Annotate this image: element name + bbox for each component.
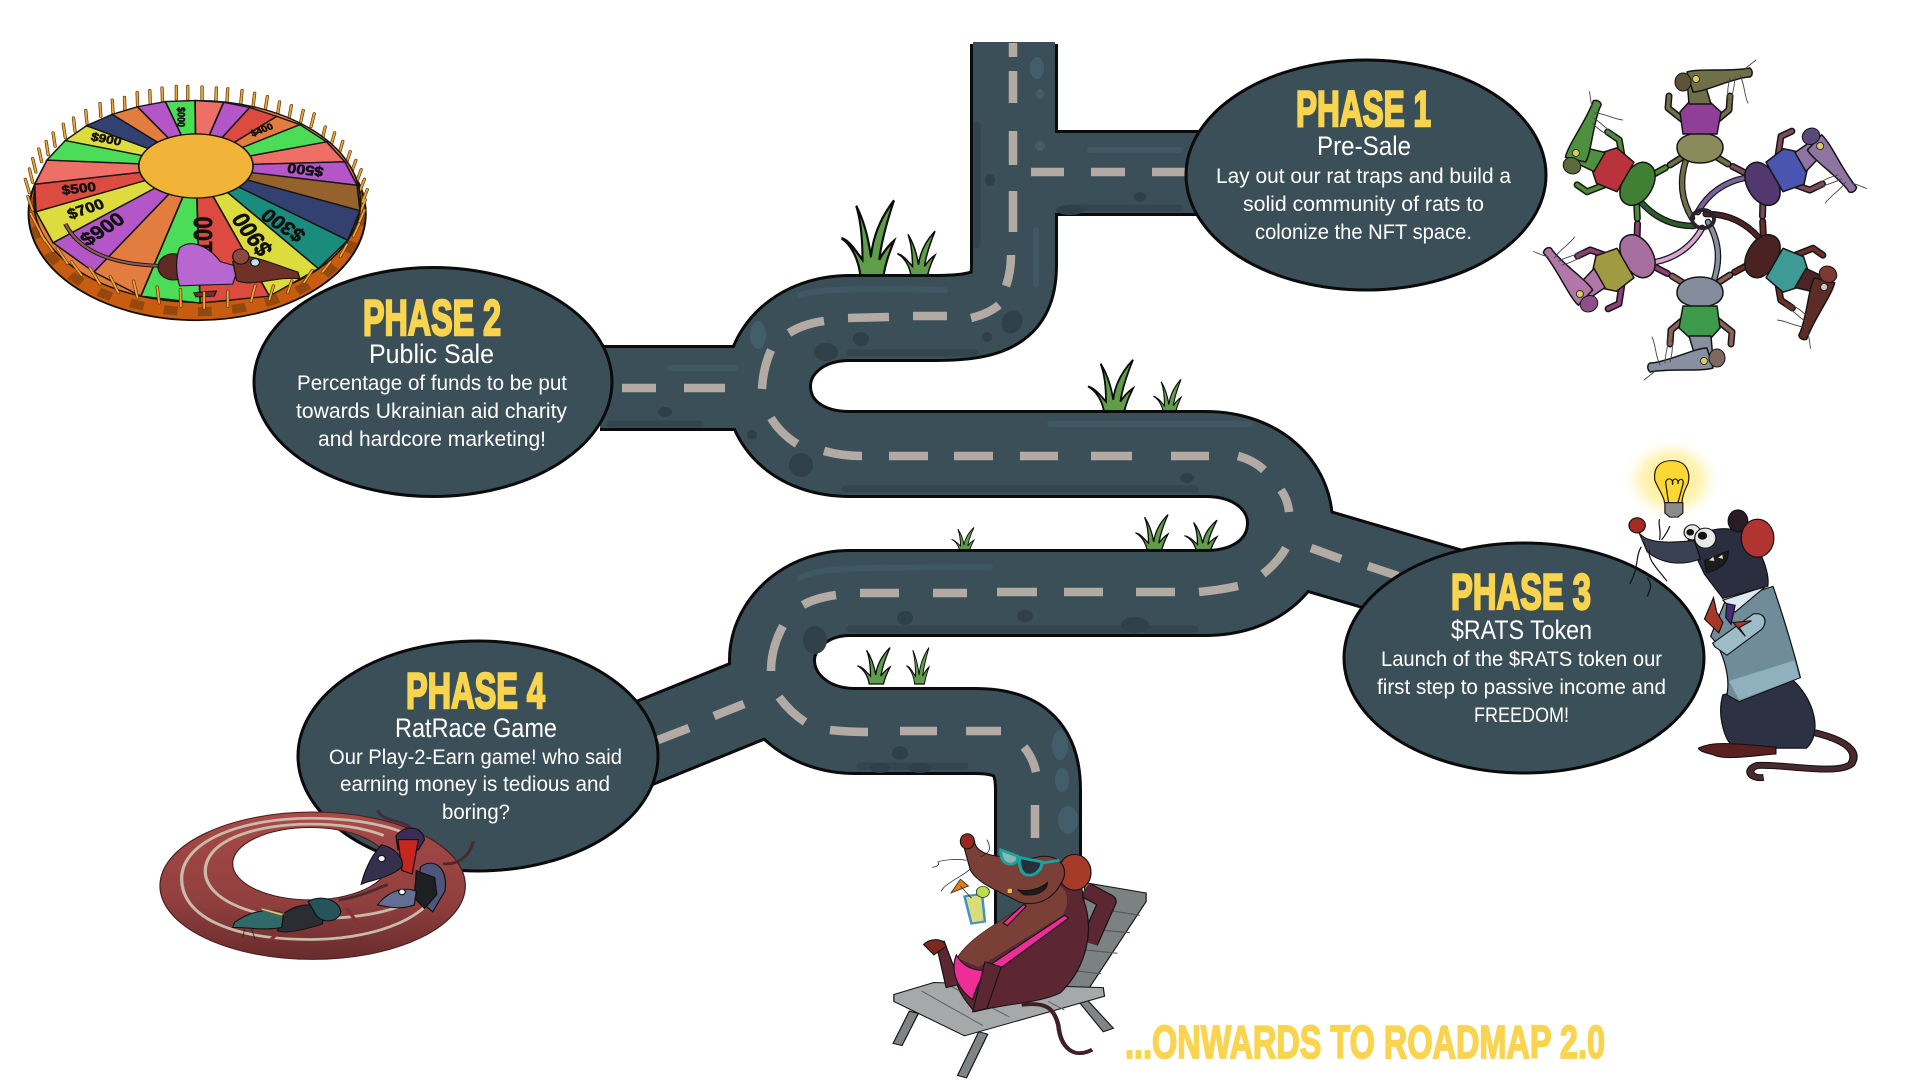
- wheel prize labels: $100: [190, 217, 219, 266]
- lightbulb glow: [1621, 437, 1723, 523]
- description: phase 4: earning money is tedious and: [340, 772, 610, 796]
- grass clumps: [842, 200, 1217, 684]
- rat sprawled on wheel: [65, 224, 300, 297]
- rat: green with red shirt: [1545, 92, 1726, 247]
- subtitle: public sale: Public Sale: [369, 339, 494, 369]
- wheel prize labels: $300: [257, 204, 310, 245]
- rat lower body: [1698, 678, 1815, 758]
- wheel prize labels: $500: [286, 160, 325, 179]
- description: phase 1: solid community of rats to: [1243, 192, 1484, 216]
- description: phase 3: FREEDOM!: [1474, 703, 1569, 727]
- winding road: [600, 42, 1450, 925]
- wheel prize labels: $400: [249, 122, 276, 139]
- description: phase 2: towards Ukrainian aid charity: [296, 399, 567, 423]
- tail knot: [1692, 210, 1714, 228]
- road shading: [610, 57, 1250, 834]
- rat arm behind head: [1085, 890, 1107, 943]
- rat tail: [1750, 733, 1854, 778]
- wheel prize labels: $900: [226, 209, 278, 260]
- wheel face: [34, 101, 360, 303]
- description: phase 4: Our Play-2-Earn game! who said: [329, 745, 622, 769]
- description: phase 2: and hardcore marketing!: [318, 427, 546, 451]
- circle of six rats illustration: [1533, 60, 1867, 380]
- panel: phase 2: [254, 268, 612, 496]
- rat tail: [1022, 1004, 1092, 1053]
- cocktail: [951, 879, 989, 924]
- sun lounger: [893, 883, 1146, 1078]
- subtitle: ratrace game: RatRace Game: [395, 713, 557, 743]
- wheel prize labels: $900: [90, 129, 123, 148]
- rat: grey with green shirt: [1644, 222, 1732, 380]
- lightbulb: [1655, 461, 1689, 517]
- rat: olive with purple shirt: [1668, 60, 1756, 218]
- heading: phase 4: PHASE 4: [406, 663, 545, 719]
- track lanes: [182, 818, 439, 939]
- whiskers: [1630, 519, 1670, 597]
- description: phase 2: Percentage of funds to be put: [297, 371, 567, 395]
- rat: blue grey: [378, 841, 473, 912]
- onwards to roadmap caption: ...ONWARDS TO ROADMAP 2.0: [1125, 1016, 1605, 1068]
- prize wheel illustration: [25, 86, 367, 320]
- description: phase 2: [296, 371, 567, 451]
- wheel prize labels: $700: [65, 196, 107, 223]
- rat: pink with olive shirt: [1533, 173, 1714, 328]
- sunglasses: [1001, 850, 1060, 875]
- heading: phase 1: PHASE 1: [1296, 81, 1431, 137]
- description: phase 4: [329, 745, 622, 824]
- rat: navy with red shirt: [361, 810, 424, 884]
- description: phase 1: Lay out our rat traps and build a: [1216, 164, 1511, 188]
- rat: lavender with blue shirt: [1686, 112, 1867, 267]
- wheel back pegs: [25, 86, 367, 222]
- description: phase 3: Launch of the $RATS token our: [1381, 647, 1662, 671]
- panel: phase 3: [1344, 543, 1704, 773]
- description: phase 1: colonize the NFT space.: [1255, 220, 1472, 244]
- rat: sprawled teal: [233, 884, 388, 941]
- lab coat: [1704, 586, 1800, 702]
- heading: phase 2: PHASE 2: [363, 290, 501, 346]
- subtitle: rats token: $RATS Token: [1451, 615, 1592, 645]
- lane dashes: [622, 43, 1398, 838]
- track ring: [160, 812, 465, 959]
- panel: phase 4: [298, 641, 658, 871]
- wheel prize labels: $000: [174, 107, 186, 128]
- rat head: [1629, 510, 1774, 598]
- wheel rim: [29, 107, 366, 320]
- subtitle: pre-sale: Pre-Sale: [1317, 131, 1411, 161]
- rat: brown with teal shirt: [1674, 193, 1855, 348]
- description: phase 3: [1377, 647, 1666, 727]
- panel: phase 1: [1186, 60, 1546, 290]
- rat head: [960, 834, 1091, 904]
- scientist rat illustration: [1621, 437, 1854, 778]
- wheel front pegs: [31, 213, 359, 308]
- lounging rat illustration: [893, 834, 1146, 1078]
- whiskers: [932, 840, 989, 891]
- description: phase 4: boring?: [442, 800, 510, 824]
- description: phase 3: first step to passive income and: [1377, 675, 1666, 699]
- rat body: [924, 877, 1107, 1012]
- wheel prize labels: $500: [61, 180, 97, 198]
- race track illustration: [160, 810, 473, 959]
- heading: phase 3: PHASE 3: [1451, 564, 1591, 620]
- description: phase 1: [1216, 164, 1511, 244]
- wheel prize labels: [61, 107, 325, 266]
- wheel prize labels: $900: [76, 209, 130, 250]
